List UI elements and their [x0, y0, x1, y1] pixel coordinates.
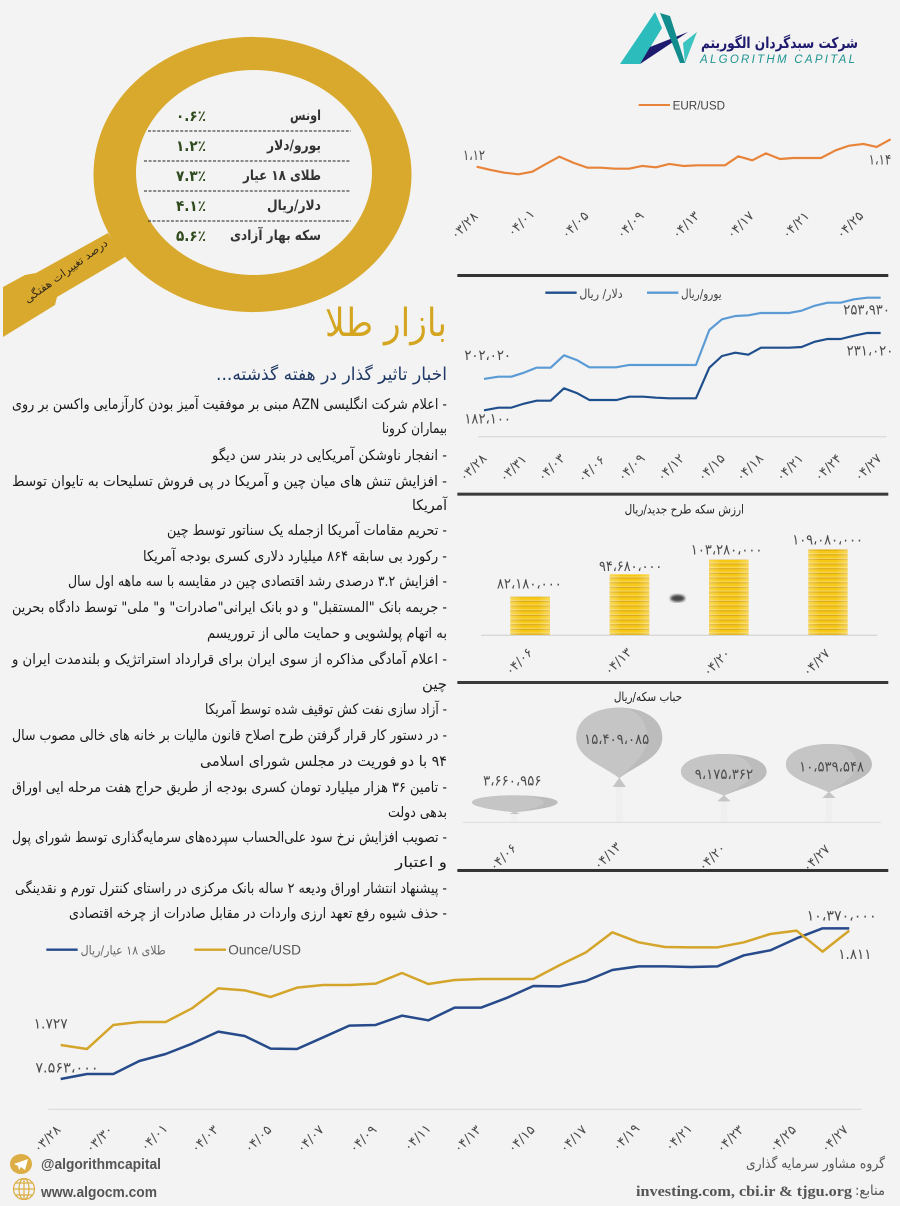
smudge mark — [670, 595, 685, 602]
news list: به اتهام پولشویی و حمایت مالی از تروریسم — [207, 626, 447, 642]
date axis: ۰۴/۰۶ — [487, 841, 520, 875]
line: euro to rial — [484, 298, 881, 379]
date axis — [503, 645, 834, 680]
table: weekly changes: اونس — [290, 108, 321, 124]
value labels: ۲۳۱،۰۲۰ — [847, 342, 893, 359]
date axis — [457, 451, 885, 486]
value labels: ۳،۶۶۰،۹۵۶ — [483, 773, 541, 790]
news list: - حذف شیوه رفع تعهد ارزی واردات در مقابل صادرات از چرخه اقتصادی — [69, 906, 447, 922]
magnifier ring — [93, 37, 412, 312]
date axis: ۰۳/۳۰ — [83, 1123, 117, 1156]
legend: dollar and euro: یورو/ریال — [681, 287, 722, 302]
coin stacks — [510, 549, 848, 635]
value labels — [497, 531, 863, 592]
date axis: ۰۴/۰۶ — [575, 453, 609, 486]
date axis: ۰۴/۱۵ — [695, 451, 729, 485]
chart: dollar and euro to rial — [457, 274, 893, 486]
value labels: ۱۵،۴۰۹،۰۸۵ — [584, 731, 649, 748]
date axis: ۰۴/۲۴ — [812, 451, 845, 485]
date axis: ۰۳/۲۸ — [448, 209, 482, 243]
news list: - پیشنهاد انتشار اوراق ودیعه ۲ ساله بانک مرکزی در راستای کنترل تورم و نقدینگی — [15, 880, 447, 897]
table: weekly changes: ۷.۳٪ — [176, 167, 206, 185]
date axis: ۰۴/۲۱ — [779, 209, 813, 242]
value labels: ۱۰،۳۷۰،۰۰۰ — [807, 908, 877, 925]
table: weekly changes: ۴.۱٪ — [176, 197, 206, 215]
value labels: ۱،۱۲ — [463, 147, 485, 164]
date axis: ۰۴/۱۳ — [451, 1123, 485, 1156]
date axis: ۰۴/۲۳ — [714, 1123, 747, 1156]
news list: - تحریم مقامات آمریکا ازجمله یک سناتور توسط چین — [167, 521, 447, 539]
news list: - تامین ۳۶ هزار میلیارد تومان کسری بودجه از طریق حراج هفت مرحله ایی اوراق — [12, 780, 447, 797]
date axis: ۰۴/۲۷ — [818, 1123, 852, 1156]
logo: Algorithm Capital: شرکت سبدگردان الگوریتم — [701, 34, 858, 52]
news list: - در دستور کار قرار گرفتن طرح اصلاح قانون مالیات بر خانه های خالی مصوب سال — [12, 727, 447, 744]
value labels: ۹۴،۶۸۰،۰۰۰ — [599, 558, 662, 575]
date axis: ۰۴/۱۳ — [591, 840, 625, 873]
date axis: ۰۴/۲۱ — [662, 1121, 696, 1155]
news list: چین — [422, 677, 447, 693]
value labels: ۱.۷۲۷ — [34, 1015, 68, 1032]
date axis: ۰۴/۱۹ — [610, 1121, 643, 1155]
value labels: ۱۸۲،۱۰۰ — [464, 410, 511, 427]
chart title: حباب سکه/ریال — [614, 690, 682, 705]
value labels: ۸۲،۱۸۰،۰۰۰ — [497, 575, 562, 592]
date axis: ۰۴/۱۷ — [724, 209, 758, 242]
date axis: ۰۴/۲۰ — [700, 646, 734, 680]
table: weekly changes: دلار/ریال — [267, 198, 321, 214]
news list: بدهی دولت — [388, 805, 447, 821]
date axis: ۰۴/۲۱ — [773, 451, 807, 485]
date axis: ۰۴/۱۵ — [505, 1123, 539, 1156]
balloon: 04/27 — [786, 744, 872, 798]
magnifier handle — [3, 233, 125, 337]
news list: بیماران کرونا — [382, 421, 447, 437]
value labels: ۷.۵۶۳،۰۰۰ — [35, 1060, 99, 1077]
table: weekly changes: طلای ۱۸ عیار — [242, 168, 321, 184]
date axis: ۰۴/۰۹ — [615, 451, 649, 485]
date axis: ۰۴/۰۳ — [535, 451, 569, 485]
value labels — [464, 301, 893, 427]
subheading: اخبار تاثیر گذار در هفته گذشته... — [216, 364, 447, 385]
news list: - جریمه بانک "المستقبل" و دو بانک ایرانی"صادرات" و" ملی" توسط دادگاه بحرین — [12, 599, 447, 616]
date axis: ۰۴/۰۵ — [559, 209, 592, 242]
date axis: ۰۳/۲۸ — [31, 1123, 64, 1156]
value labels: ۲۰۲،۰۲۰ — [464, 347, 511, 364]
value labels — [483, 731, 864, 790]
line: dollar to rial — [484, 333, 881, 410]
date axis: ۰۴/۲۷ — [800, 842, 834, 876]
news list: ۹۴ با دو فوریت در مجلس شورای اسلامی — [200, 754, 447, 770]
date axis: ۰۴/۰۱ — [138, 1121, 171, 1155]
news list: - اعلام آمادگی مذاکره از سوی ایران برای قرارداد استراتژیک و بلندمدت ایران و — [11, 650, 447, 668]
news list: - افزایش ۳.۲ درصدی رشد اقتصادی چین در مقایسه با سه ماهه اول سال — [68, 574, 447, 590]
line: EUR/USD — [477, 139, 891, 174]
icon: telegram — [10, 1154, 32, 1174]
balloon: 04/20 — [681, 754, 767, 801]
date axis: ۰۴/۱۳ — [669, 209, 703, 242]
telegram handle: @algorithmcapital — [41, 1157, 161, 1173]
news list: - افزایش تنش های میان چین و آمریکا در پی فروش تسلیحات به تایوان توسط — [12, 472, 447, 490]
table: weekly changes: ۰.۶٪ — [176, 107, 206, 125]
date axis: ۰۴/۱۱ — [401, 1121, 435, 1155]
date axis — [448, 207, 867, 243]
icon: globe — [14, 1178, 34, 1200]
table: weekly changes: یورو/دلار — [266, 138, 321, 154]
news list — [11, 395, 448, 922]
news list: - اعلام شرکت انگلیسی AZN مبنی بر موفقیت آمیز بودن کارآزمایی واکسن بر روی — [12, 395, 447, 413]
chart: new-design coin value — [457, 493, 888, 680]
value labels: ۱۰،۵۳۹،۵۴۸ — [799, 759, 864, 776]
date axis: ۰۴/۲۰ — [696, 841, 729, 875]
legend: gold and ounce: Ounce/USD — [228, 942, 301, 957]
news list: و اعتبار — [394, 855, 447, 871]
date axis: ۰۴/۱۸ — [733, 451, 767, 485]
news list: - رکورد بی سابقه ۸۶۴ میلیارد دلاری کسری بودجه آمریکا — [143, 547, 447, 565]
chart title: ارزش سکه طرح جدید/ریال — [625, 503, 744, 518]
date axis: ۰۳/۳۱ — [497, 452, 530, 486]
chart: gold and ounce prices — [31, 908, 877, 1156]
news list: - آزاد سازی نفت کش توقیف شده توسط آمریکا — [205, 700, 447, 718]
date axis: ۰۴/۱۷ — [557, 1123, 591, 1156]
value labels: ۱،۱۴ — [869, 152, 891, 169]
legend: EUR/USD — [639, 98, 725, 112]
value labels: ۱.۸۱۱ — [838, 946, 872, 963]
date axis — [487, 840, 834, 876]
legend: gold and ounce: طلای ۱۸ عیار/ریال — [81, 943, 166, 958]
chart: EUR/USD line — [448, 98, 891, 243]
chart: coin bubble balloons — [457, 681, 888, 876]
date axis: ۰۴/۰۹ — [614, 209, 648, 242]
value labels: ۲۵۳،۹۳۰ — [843, 301, 890, 318]
date axis: ۰۴/۰۶ — [503, 645, 536, 679]
date axis: ۰۴/۰۵ — [242, 1123, 275, 1156]
date axis: ۰۴/۰۷ — [294, 1123, 328, 1156]
news list: - انفجار ناوشکن آمریکایی در بندر سن دیگو — [211, 446, 447, 464]
sources: منابع: — [855, 1183, 885, 1199]
table: weekly changes: ۱.۲٪ — [176, 137, 206, 155]
balloon: 04/13 — [576, 708, 662, 787]
value labels: ۱۰۹،۰۸۰،۰۰۰ — [792, 531, 863, 548]
value labels: ۹،۱۷۵،۳۶۲ — [695, 766, 753, 783]
table: weekly changes: ۵.۶٪ — [176, 227, 206, 245]
date axis: ۰۴/۰۱ — [505, 207, 538, 240]
date axis: ۰۴/۲۵ — [834, 209, 867, 242]
table: weekly changes: سکه بهار آزادی — [230, 226, 321, 244]
group caption: گروه مشاور سرمایه گذاری — [746, 1155, 885, 1172]
date axis: ۰۴/۱۲ — [654, 451, 688, 485]
line: gold 18k to rial — [61, 928, 849, 1079]
sources: investing.com, cbi.ir & tjgu.org — [636, 1184, 853, 1200]
legend: gold and ounce — [46, 942, 301, 958]
website: www.algocm.com — [40, 1185, 157, 1201]
legend: EUR/USD: EUR/USD — [673, 98, 725, 112]
date axis: ۰۴/۲۷ — [852, 451, 885, 485]
legend: dollar and euro — [545, 287, 722, 302]
value labels — [463, 147, 891, 169]
legend: dollar and euro: دلار/ ریال — [579, 287, 623, 302]
value labels — [34, 908, 877, 1077]
news list: - تصویب افزایش نرخ سود علی‌الحساب سپرده‌های سرمایه‌گذاری توسط شورای پول — [12, 829, 447, 846]
magnifier: weekly change panel — [3, 37, 412, 337]
title: بازار طلا — [325, 301, 447, 346]
balloon: 04/06 — [472, 795, 558, 814]
date axis: ۰۴/۱۳ — [602, 645, 635, 679]
date axis: ۰۳/۲۸ — [457, 451, 490, 485]
news list: آمریکا — [412, 496, 448, 514]
date axis: ۰۴/۲۷ — [800, 646, 834, 680]
date axis — [31, 1121, 852, 1156]
value labels: ۱۰۳،۲۸۰،۰۰۰ — [691, 541, 762, 558]
logo: Algorithm Capital: ALGORITHM CAPITAL — [699, 54, 855, 66]
logo: Algorithm Capital — [620, 12, 858, 66]
handle caption: درصد تغییرات هفتگی — [22, 236, 110, 306]
table: weekly changes — [144, 107, 351, 245]
line: ounce to USD — [61, 931, 849, 1049]
date axis: ۰۴/۲۵ — [766, 1123, 800, 1156]
date axis: ۰۴/۰۹ — [347, 1123, 380, 1156]
date axis: ۰۴/۰۳ — [188, 1123, 222, 1156]
